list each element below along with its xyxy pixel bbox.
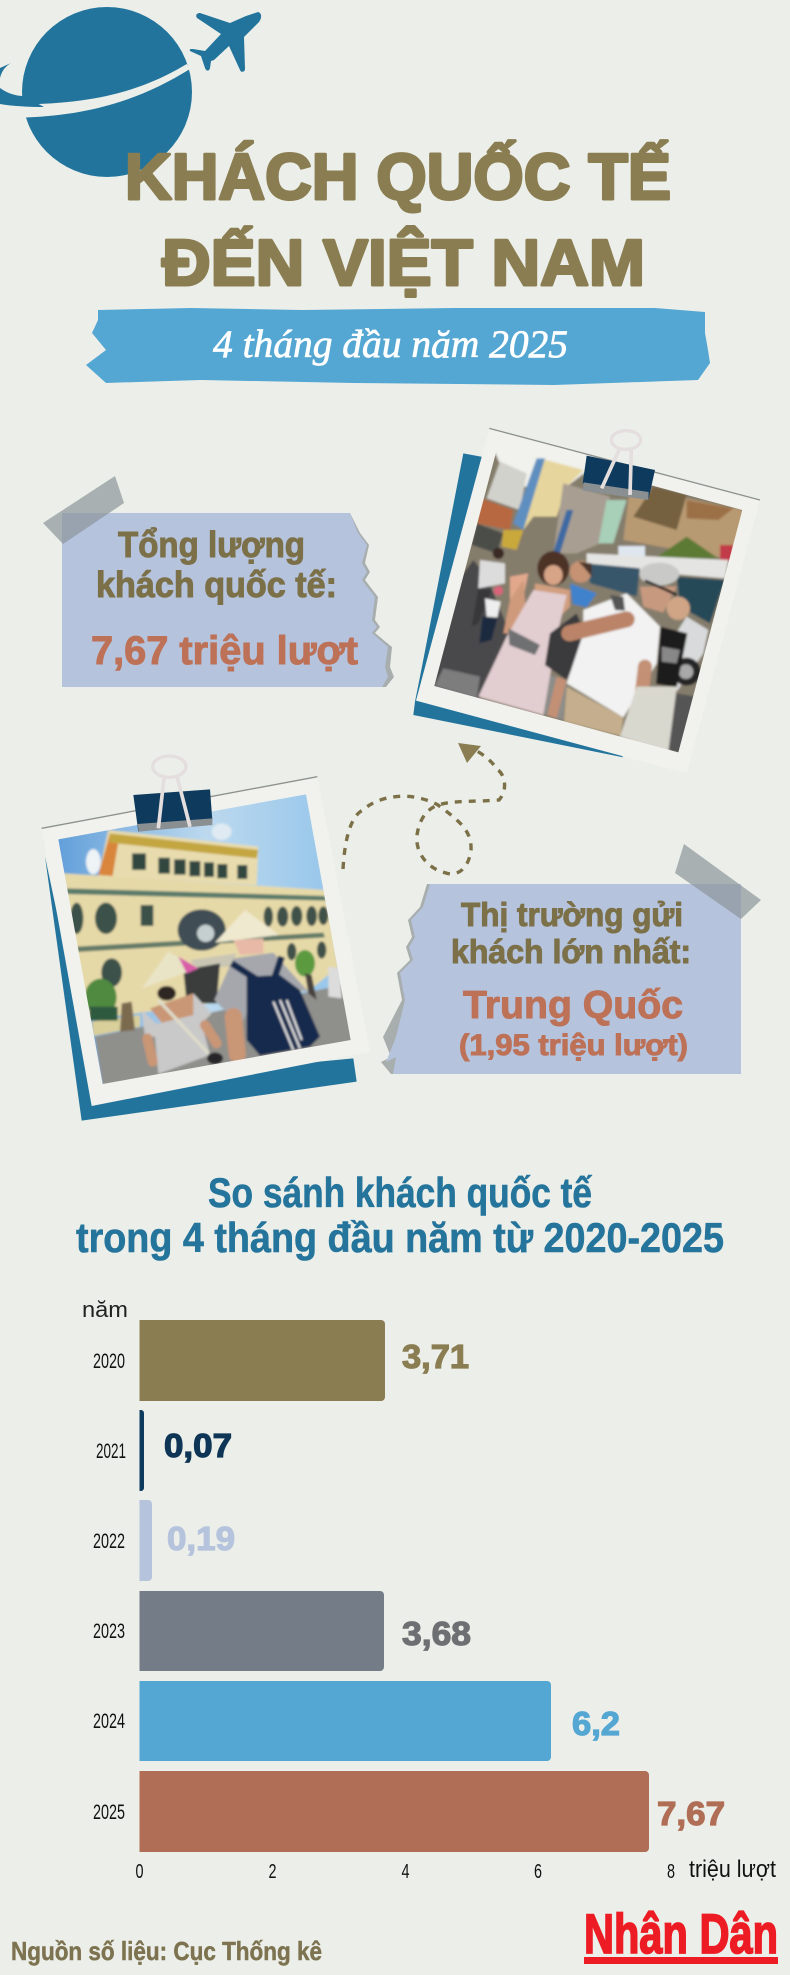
bar: 2023 (93, 1591, 471, 1671)
label: total visitors: khách quốc tế: (96, 564, 337, 605)
label: top source market: khách lớn nhất: (451, 933, 691, 970)
bar: 2021 (96, 1410, 232, 1491)
bar: 2025: 2025 (93, 1801, 125, 1824)
bar: 2020: 3,71 (402, 1338, 469, 1375)
axis label: year: năm (82, 1297, 128, 1322)
bar: 2025: 7,67 (657, 1795, 725, 1832)
icon: binder clip (133, 756, 212, 832)
banner: subtitle brush stroke (86, 308, 710, 385)
x axis labels: 0 (136, 1861, 144, 1883)
bar: 2024: 6,2 (572, 1705, 620, 1742)
photo: tourists on street (413, 428, 760, 773)
panel: total visitors card (43, 476, 394, 687)
label: total visitors (96, 524, 337, 605)
x axis labels: 4 (402, 1861, 410, 1883)
value: top market: (1,95 triệu lượt) (459, 1029, 688, 1062)
heading: chart title: trong 4 tháng đầu năm từ 2020-2025 (76, 1214, 724, 1261)
title (125, 140, 671, 299)
arrow: dashed loop (343, 743, 505, 874)
bar: 2021: 2021 (96, 1440, 126, 1463)
bar: 2025 (93, 1771, 725, 1852)
bar chart (82, 1297, 776, 1883)
icon: tape (675, 844, 761, 919)
x axis labels (136, 1861, 675, 1883)
bar: 2023: 2023 (93, 1620, 125, 1643)
icon: tape (43, 476, 124, 544)
heading: chart title (76, 1169, 724, 1261)
value: total visitors: 7,67 triệu lượt (91, 629, 358, 673)
axis unit: triệu lượt (689, 1856, 776, 1883)
value: top market: Trung Quốc (463, 984, 683, 1027)
title: ĐẾN VIỆT NAM (162, 226, 645, 299)
value: top market (459, 984, 688, 1062)
photo: Saigon central post office (42, 756, 370, 1121)
title: KHÁCH QUỐC TẾ (125, 140, 671, 213)
x axis labels: 6 (534, 1861, 542, 1883)
bar: 2022: 2022 (93, 1530, 125, 1553)
bar: 2023: 3,68 (402, 1615, 471, 1652)
bar: 2022: 0,19 (167, 1520, 235, 1557)
bar: 2020 (93, 1320, 469, 1401)
bar: 2020: 2020 (93, 1350, 125, 1373)
banner: subtitle brush stroke: 4 tháng đầu năm 2025 (213, 323, 568, 366)
x axis labels: 8 (667, 1861, 675, 1883)
bar: 2022 (93, 1500, 235, 1581)
x axis labels: 2 (268, 1861, 276, 1883)
source note: Nguồn số liệu: Cục Thống kê (11, 1936, 322, 1966)
icon: globe with airplane (0, 7, 261, 177)
label: total visitors: Tổng lượng (118, 524, 305, 565)
heading: chart title: So sánh khách quốc tế (208, 1169, 593, 1216)
icon: binder clip (583, 431, 655, 500)
bar: 2024 (93, 1681, 620, 1761)
bar: 2021: 0,07 (164, 1427, 232, 1464)
panel: top source market card (381, 844, 761, 1074)
label: top source market (451, 896, 691, 970)
label: top source market: Thị trường gửi (461, 896, 683, 933)
bar: 2024: 2024 (93, 1710, 125, 1733)
